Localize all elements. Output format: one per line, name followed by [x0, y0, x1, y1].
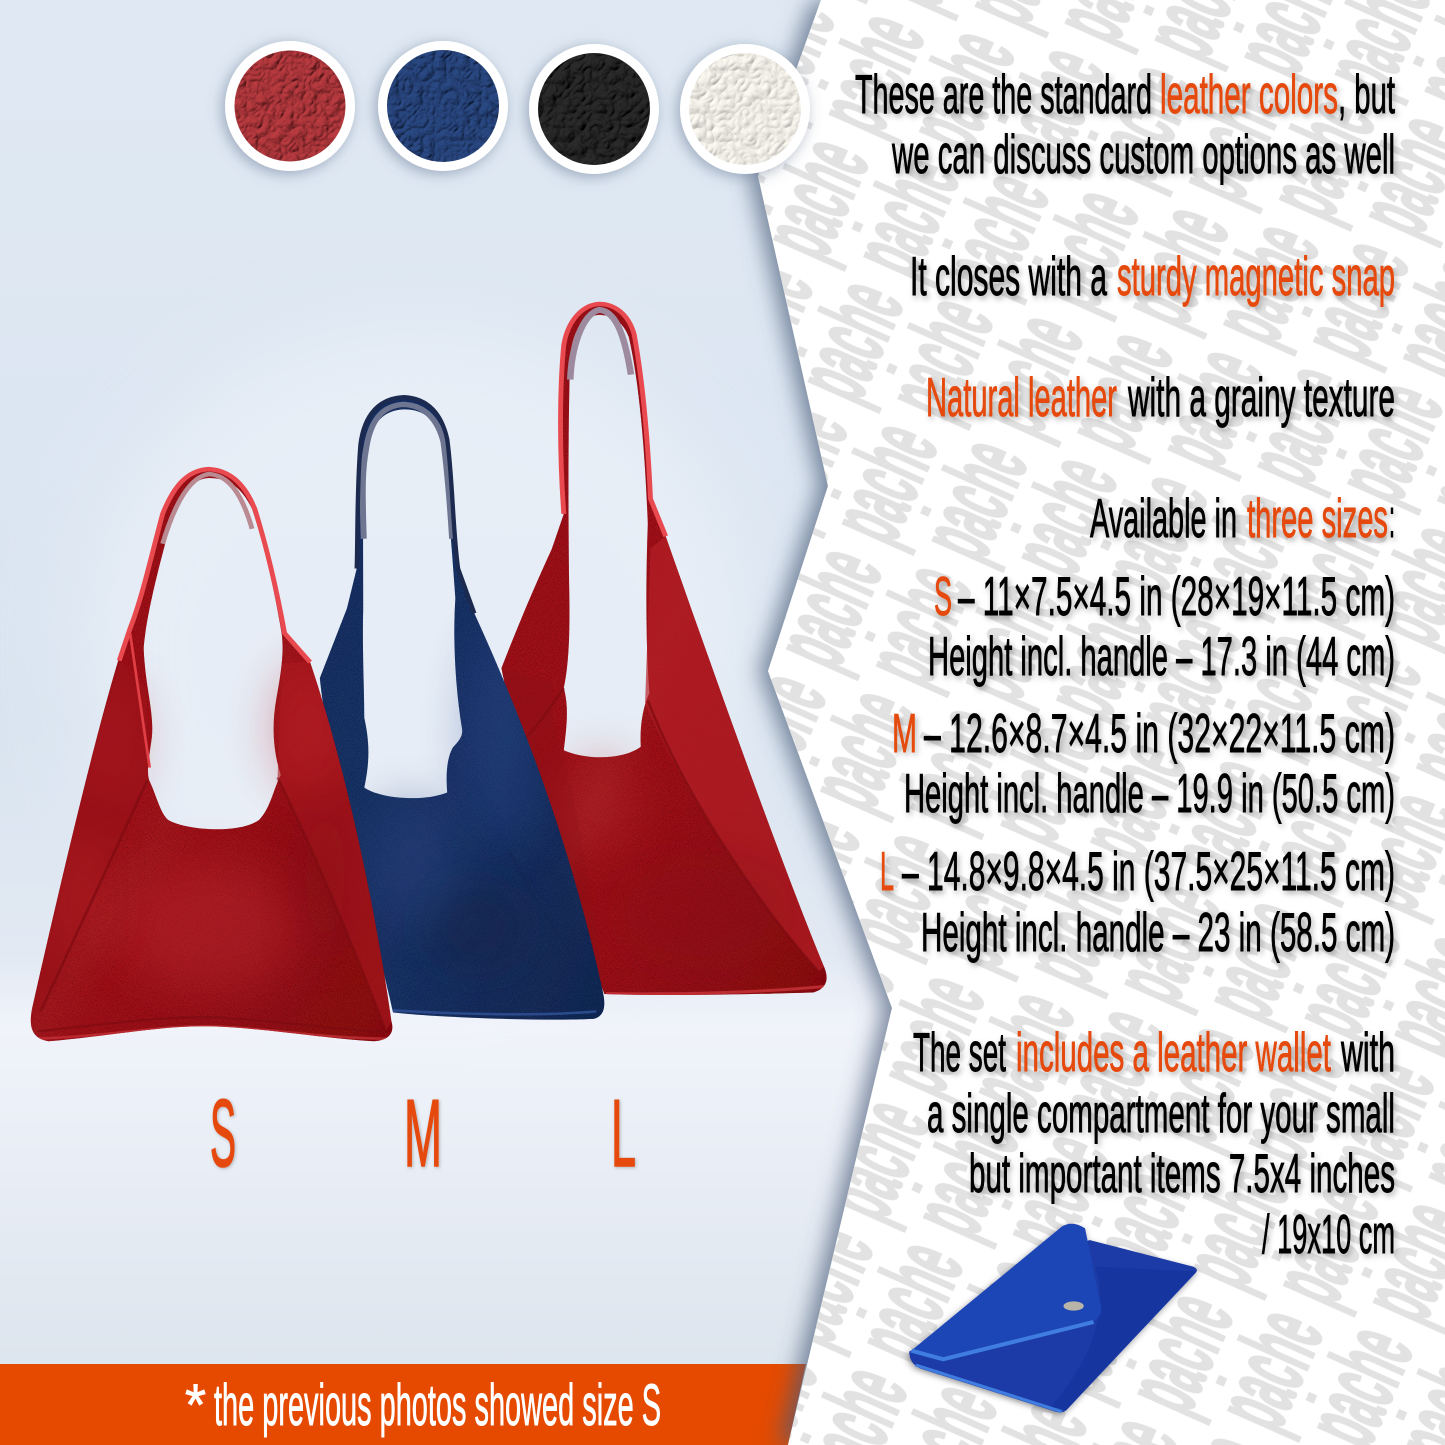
photo: three leather hobo bags in sizes S, M and L [31, 304, 827, 1041]
text: size L dimensions: L [880, 840, 894, 902]
wallet flap [911, 1224, 1101, 1359]
text: included wallet: with [1340, 1021, 1395, 1083]
text: : [1389, 487, 1395, 549]
text: size S dimensions: S [934, 565, 952, 627]
text: magnetic snap: It closes with a [910, 245, 1107, 307]
size labels under the bags: M [404, 1080, 442, 1187]
text: leather colors [855, 63, 1395, 185]
text: leather colors: These are the standard [855, 63, 1152, 125]
swatch: white [680, 44, 810, 174]
text: size L dimensions [880, 840, 1395, 963]
swatch: navy blue [378, 41, 508, 171]
swatch: black [529, 44, 659, 174]
wallet photo [909, 1224, 1197, 1412]
footnote bar [0, 1364, 806, 1445]
text: size M dimensions [892, 702, 1395, 824]
bag: size S red [31, 469, 392, 1041]
text: included wallet: The set [913, 1021, 1006, 1083]
watermark: repeated brand word [758, 0, 1445, 1445]
size labels under the bags: S [210, 1080, 236, 1187]
bag: size L red [501, 304, 827, 995]
footnote text [185, 1373, 661, 1438]
text: included wallet [913, 1021, 1395, 1265]
text: three sizes heading: Available in [1090, 487, 1237, 549]
text: size M dimensions: M [892, 702, 917, 764]
leather color swatches [225, 41, 810, 174]
wallet snap [1063, 1301, 1084, 1311]
white zigzag panel with watermark pattern [758, 0, 1445, 1445]
text: L [611, 1080, 636, 1187]
text: natural leather: Natural leather [926, 366, 1117, 428]
bag: size M navy [320, 397, 604, 1020]
footnote text: * [185, 1373, 206, 1438]
size labels under the bags [210, 1080, 636, 1187]
text: leather colors: , but [1338, 63, 1395, 125]
photo background: studio wall and floor [0, 0, 900, 1445]
swatch: red [225, 41, 355, 171]
text: size S dimensions [928, 565, 1395, 687]
footnote bar: the previous photos showed size S [214, 1373, 661, 1438]
wallet body [909, 1240, 1197, 1412]
